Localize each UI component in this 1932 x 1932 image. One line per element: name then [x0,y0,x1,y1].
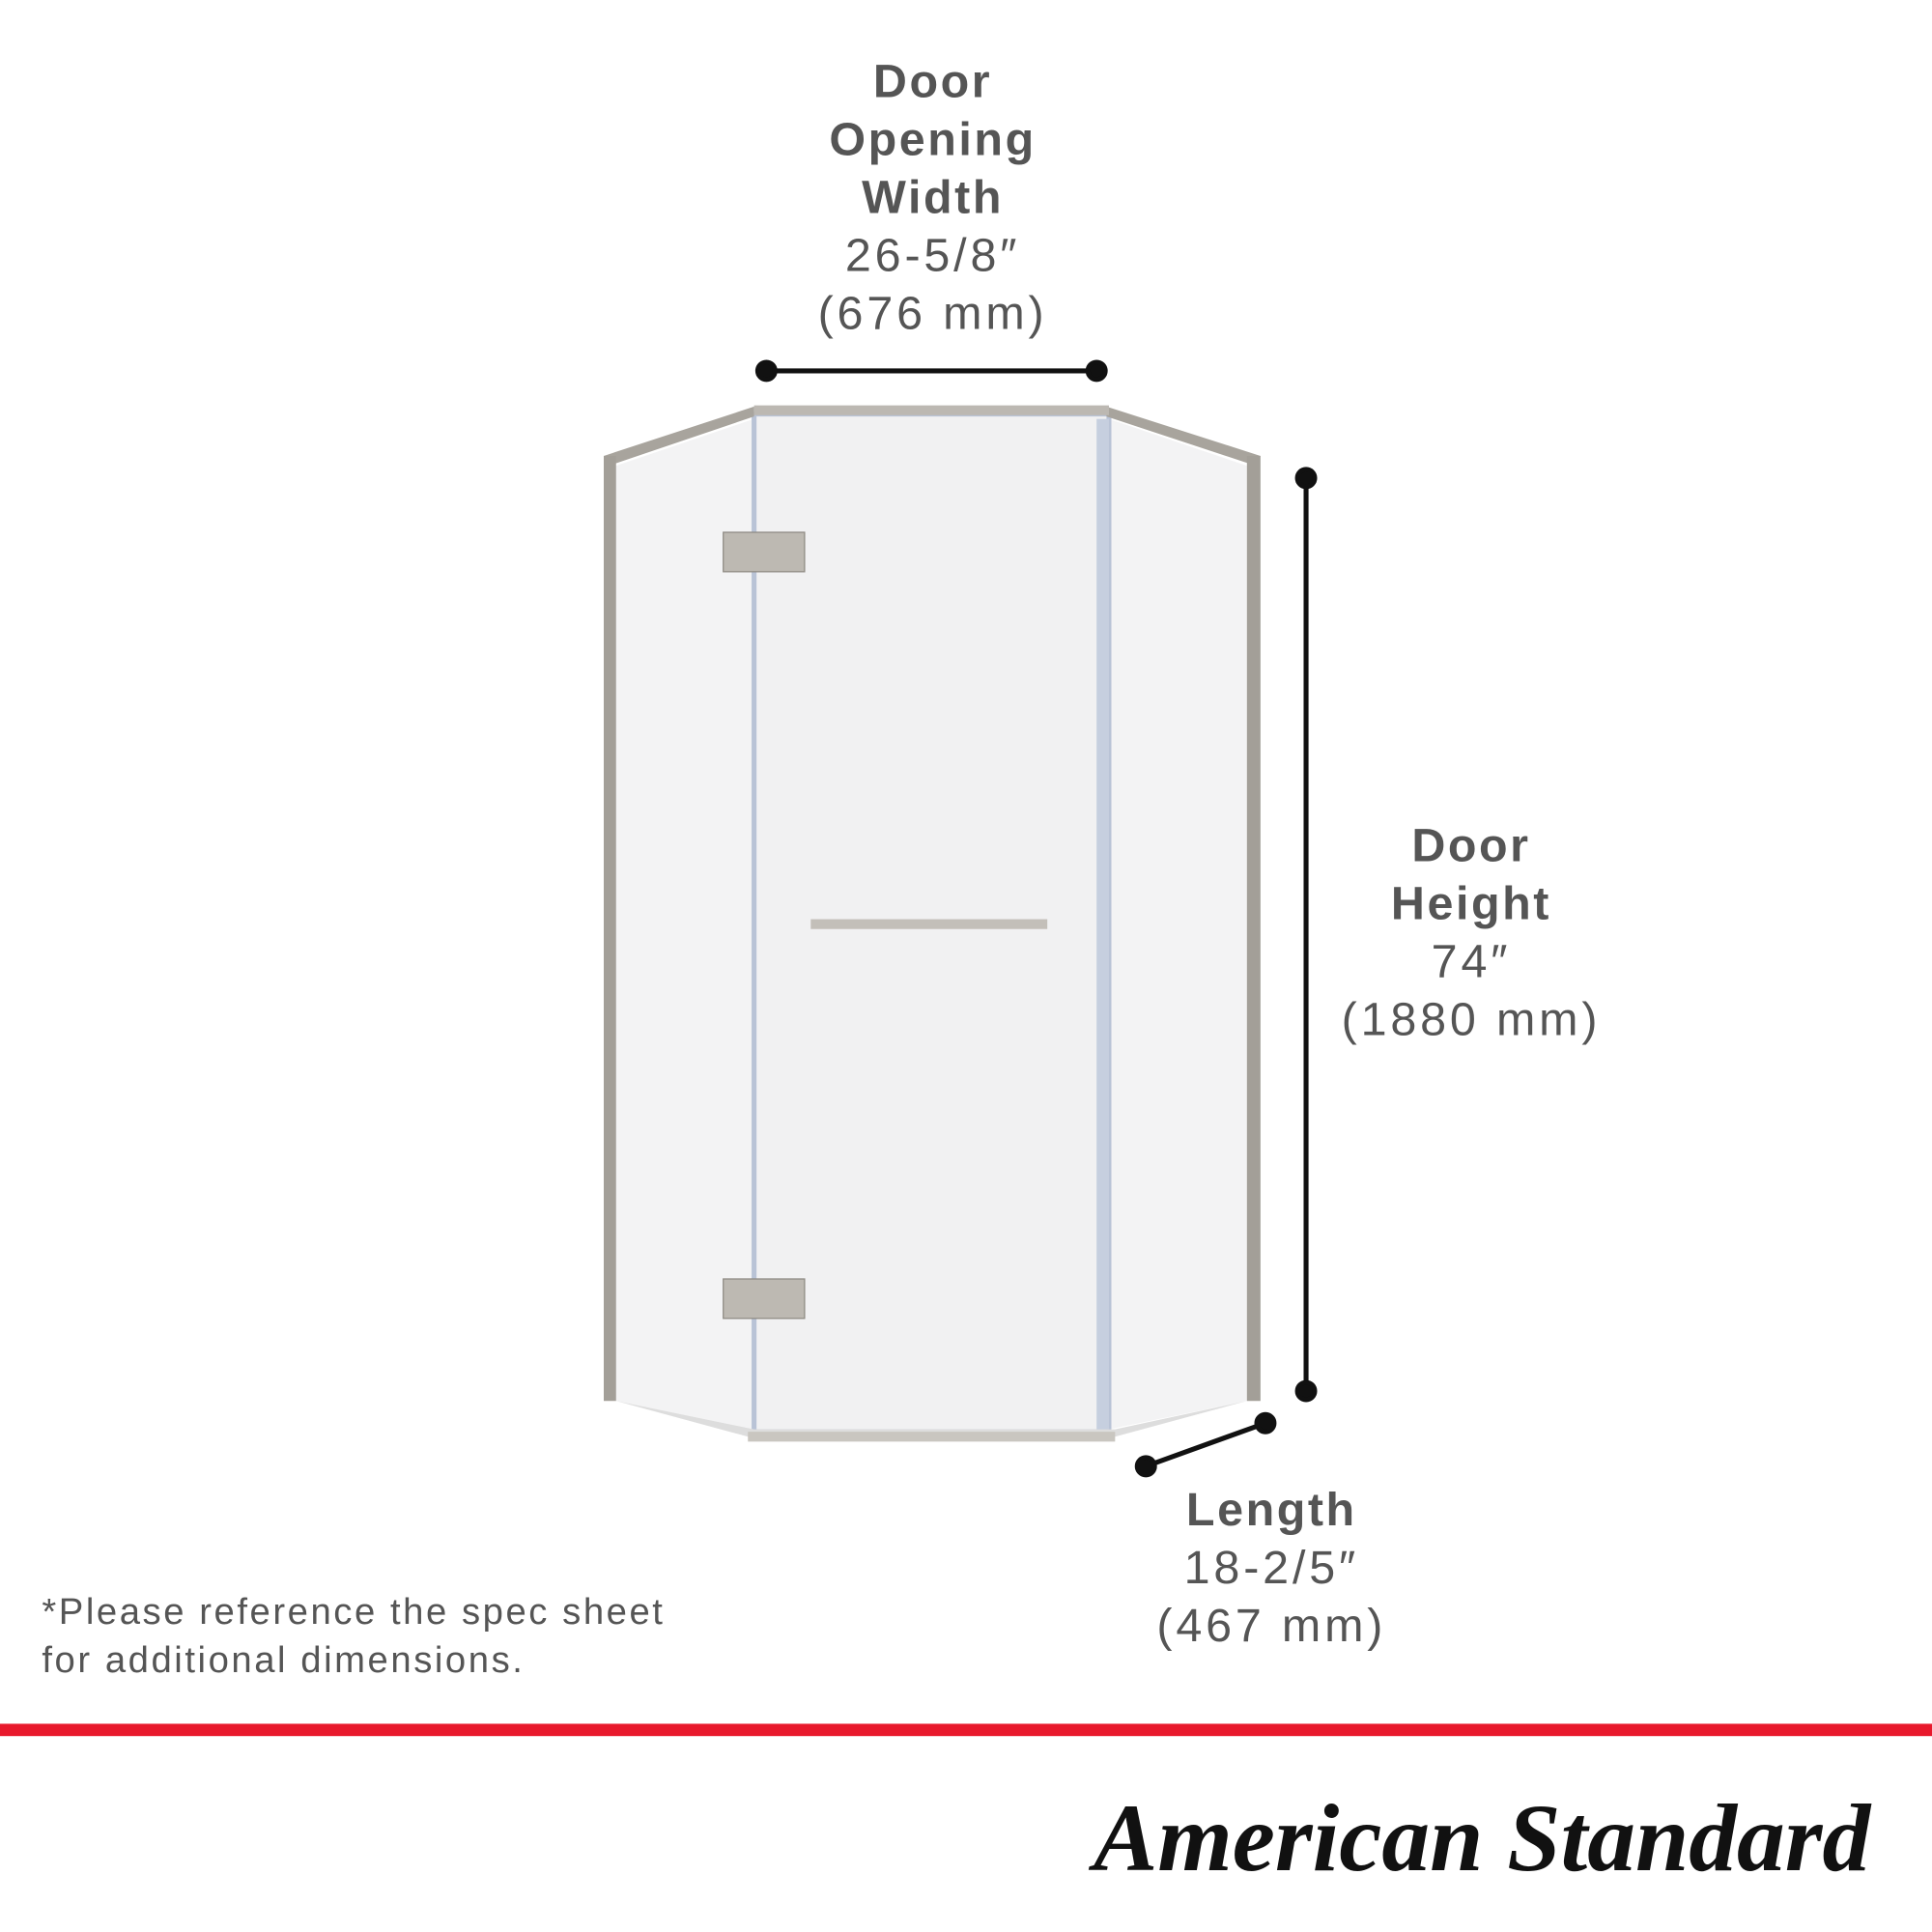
text: door opening width: Opening [829,114,1037,166]
text: door opening width: Door [873,56,992,108]
icon: hinges [724,532,805,1319]
footnote: *Please reference the spec sheet [42,1591,665,1633]
text: door height: 74″ [1432,935,1511,987]
text: length: 18-2/5″ [1184,1542,1359,1594]
logo: American Standard [1088,1784,1871,1891]
footnote [42,1591,665,1681]
dimension: height line [1297,469,1315,1400]
text: door height: Door [1411,820,1531,872]
text: length: (467 mm) [1156,1600,1386,1652]
footnote: for additional dimensions. [42,1639,525,1681]
shower enclosure [604,406,1261,1441]
red divider [0,1723,1932,1736]
text: door opening width: Width [862,172,1004,224]
text: door opening width [818,56,1048,340]
text: length: Length [1186,1484,1357,1536]
text: door opening width: (676 mm) [818,288,1048,340]
dimension: top width line [757,362,1105,380]
dimension: length line [1137,1414,1274,1475]
text: door opening width: 26-5/8″ [845,230,1020,282]
text: door height: (1880 mm) [1342,993,1601,1045]
text: length [1156,1484,1386,1652]
text: door height: Height [1391,878,1551,930]
text: door height [1342,820,1601,1045]
door handle [810,920,1047,929]
